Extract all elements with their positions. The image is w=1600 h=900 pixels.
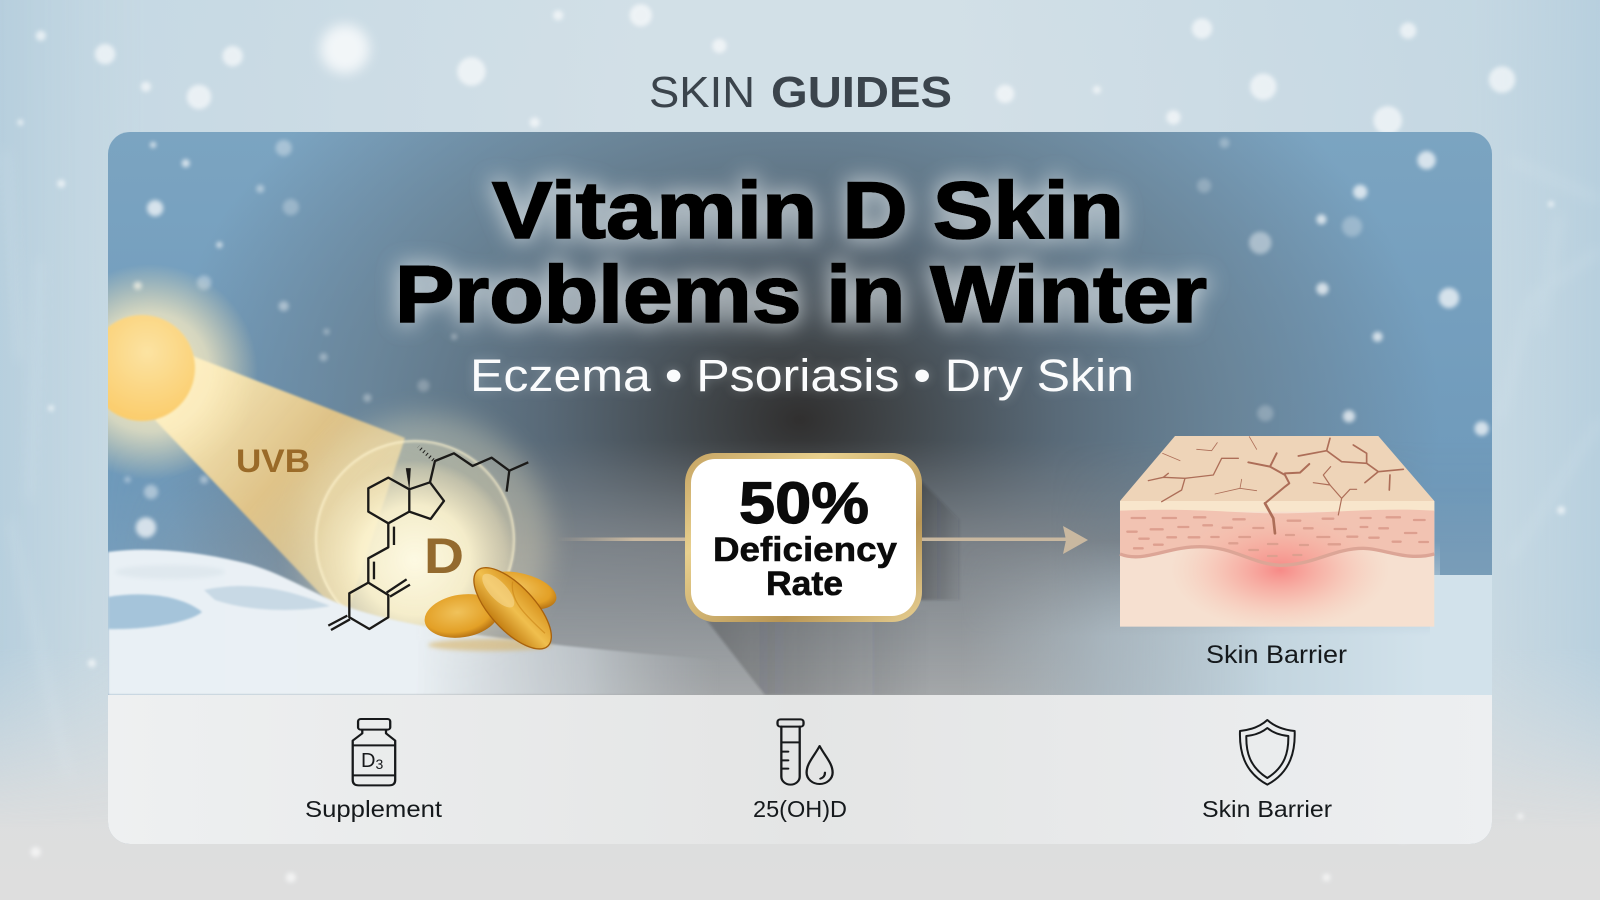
panel: winter sky backdrop (108, 132, 1492, 844)
UVB label: UVB (236, 443, 310, 479)
D letter: D (424, 528, 464, 584)
softgel capsules (424, 567, 556, 654)
brand header: SKIN (649, 68, 755, 117)
vitamin D bubble (300, 415, 550, 665)
25(OH)D label: 25(OH)D (753, 796, 847, 822)
badge shadow (705, 480, 960, 695)
supplement label: Supplement (305, 796, 443, 822)
snow drift (108, 550, 720, 695)
sun (108, 268, 254, 476)
deficiency rate label: Rate (766, 565, 843, 603)
stat badge (685, 453, 922, 622)
brand header: GUIDES (771, 68, 952, 117)
panel title (395, 166, 1207, 340)
arrow from vitamin D to skin (556, 526, 1088, 554)
vitamin D molecule (328, 447, 528, 630)
title line 2: Problems in Winter (395, 250, 1207, 340)
main panel (42, 132, 1492, 845)
title line 1: Vitamin D Skin (492, 166, 1124, 256)
skin cross-section illustration (1120, 436, 1434, 627)
icon: shield (1240, 720, 1295, 785)
D3 label on bottle: D (361, 750, 375, 772)
subtitle: Eczema • Psoriasis • Dry Skin (470, 350, 1134, 401)
UVB light beam (155, 355, 405, 620)
deficiency rate label: Deficiency (713, 531, 897, 569)
50 percent figure: 50% (739, 471, 869, 536)
skin barrier icon label: Skin Barrier (1202, 796, 1332, 822)
D3 label on bottle: 3 (375, 756, 383, 772)
skin barrier caption: Skin Barrier (1206, 641, 1347, 669)
icon: test tube and drop (778, 719, 833, 785)
bottom icon band (108, 695, 1492, 845)
icon: D3 supplement bottle (353, 719, 395, 785)
